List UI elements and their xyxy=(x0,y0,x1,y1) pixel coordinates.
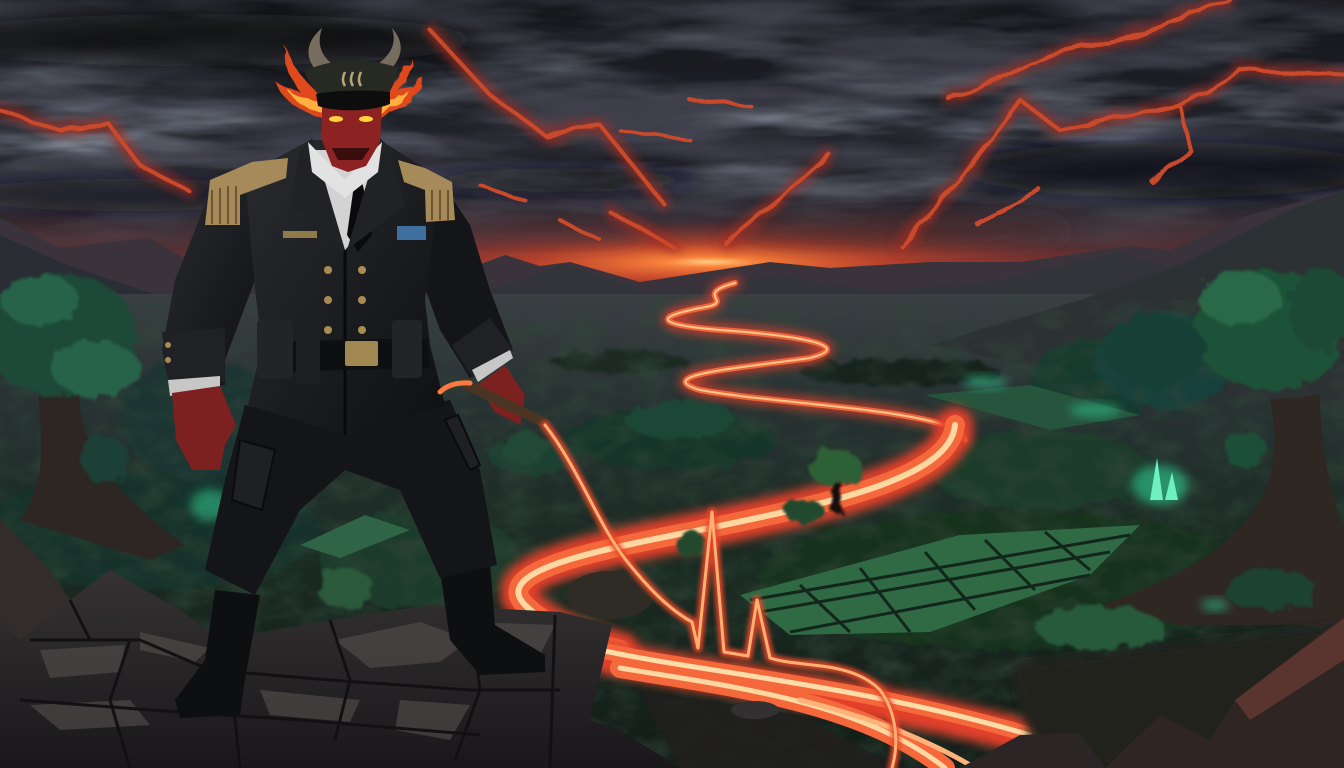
whip handle xyxy=(465,384,545,423)
valley floor xyxy=(0,294,1344,768)
horizon glow xyxy=(310,220,1110,304)
burning river xyxy=(518,283,1030,768)
trousers xyxy=(205,400,497,595)
foreground ferns xyxy=(317,568,1316,650)
sky xyxy=(0,0,1344,304)
collar xyxy=(308,142,382,198)
ground texture xyxy=(0,300,1344,768)
buttons xyxy=(165,266,366,363)
fields xyxy=(300,385,1140,635)
right ridge xyxy=(930,190,1344,410)
left arm xyxy=(162,180,260,390)
peaked cap xyxy=(305,61,398,98)
red lightning in the clouds xyxy=(0,0,1344,248)
shirt cuffs xyxy=(168,350,513,396)
cap badge xyxy=(343,72,361,86)
epaulettes xyxy=(205,158,455,225)
belt with buckle and pouches xyxy=(257,320,430,384)
lapels xyxy=(290,138,405,250)
boulder xyxy=(0,518,70,640)
foreground rocks bottom right xyxy=(960,615,1344,768)
green crystal glows xyxy=(190,375,1229,611)
small mid-valley trees xyxy=(501,400,862,558)
tree: right foreground xyxy=(1100,268,1344,625)
forest masses in valley xyxy=(0,312,1260,650)
head xyxy=(322,106,382,172)
hands xyxy=(172,365,525,470)
tree: left foreground xyxy=(0,273,185,560)
demon officer xyxy=(162,28,545,718)
jacket xyxy=(245,140,445,435)
storm clouds xyxy=(0,0,1344,250)
breast tab xyxy=(283,231,317,238)
right tree canopy xyxy=(1105,268,1344,468)
lit rock plates xyxy=(30,622,555,740)
cliff ledge under the figure xyxy=(0,518,680,768)
glowing eyes xyxy=(329,116,373,122)
distant mountains xyxy=(0,190,1344,768)
glowing whip with heartbeat trace xyxy=(440,383,896,768)
centre seam xyxy=(344,250,346,435)
right arm xyxy=(415,180,513,378)
boots xyxy=(175,565,545,718)
shirt and tie xyxy=(312,150,378,250)
left tree canopy xyxy=(0,273,139,484)
cuffs xyxy=(162,318,513,390)
flames xyxy=(276,45,424,118)
river bank and lower rocks xyxy=(566,571,1344,768)
dark cloud banks xyxy=(0,14,1344,244)
medal bar xyxy=(397,226,426,240)
horns xyxy=(308,28,401,76)
trouser pockets xyxy=(232,415,480,510)
